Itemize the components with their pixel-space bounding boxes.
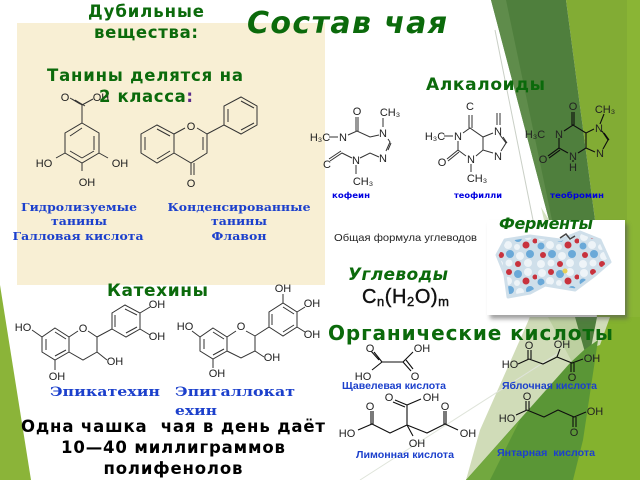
molecule: gallic acid: OH xyxy=(79,177,95,189)
molecule: malic acid: O xyxy=(525,340,534,352)
heading: tannins split in two classes: 2 класса: xyxy=(99,87,193,106)
molecule: theophylline: N xyxy=(494,151,502,163)
molecule: succinic acid: HO xyxy=(499,413,516,425)
labels: catechin names: ехин xyxy=(175,404,218,419)
molecule: oxalic acid: O xyxy=(411,371,420,383)
molecule: citric acid: O xyxy=(441,401,450,413)
background: left green wedge xyxy=(0,285,31,480)
molecule: epigallocatechin: O xyxy=(237,321,246,333)
molecule: epicatechin: OH xyxy=(149,331,165,343)
molecule: malic acid: OH xyxy=(554,339,570,351)
molecule: theophylline: CH₃ xyxy=(467,173,487,185)
label: condensed tannins: Флавон xyxy=(212,230,266,243)
molecule: epigallocatechin: OH xyxy=(264,352,280,364)
label: hydrolysable tannins: танины xyxy=(51,215,107,228)
labels: acid names: Щавелевая кислота xyxy=(342,381,446,392)
molecule: theobromine: H xyxy=(569,162,577,174)
formula: carbohydrates: C xyxy=(362,286,376,308)
labels: alkaloid names: теофилли xyxy=(454,191,502,200)
molecule: theophylline: O xyxy=(438,157,447,169)
molecule: epicatechin: OH xyxy=(49,371,65,383)
labels: acid names: Яблочная кислота xyxy=(502,380,597,392)
label: condensed tannins: танины xyxy=(211,215,267,228)
molecule: citric acid: OH xyxy=(423,392,439,404)
molecule: oxalic acid: HO xyxy=(355,371,372,383)
molecule: caffeine xyxy=(310,106,400,188)
molecule: theophylline: N xyxy=(467,154,475,166)
molecule: theobromine xyxy=(525,101,615,174)
molecule: succinic acid xyxy=(499,391,603,439)
heading: tannins split in two classes: Танины делятся на xyxy=(47,66,243,85)
labels: catechin names xyxy=(50,385,295,419)
molecule: flavone: O xyxy=(187,121,196,133)
molecule: caffeine: N xyxy=(379,128,387,140)
molecule: citric acid: O xyxy=(385,392,394,404)
molecule: malic acid: HO xyxy=(502,359,519,371)
molecule: oxalic acid: O xyxy=(366,343,375,355)
panel: enzyme picture xyxy=(487,214,628,319)
molecule: epigallocatechin: OH xyxy=(209,368,225,380)
molecule: flavone xyxy=(141,97,257,190)
molecule: epigallocatechin: OH xyxy=(304,298,320,310)
molecule: epigallocatechin: HO xyxy=(177,321,194,333)
label: hydrolysable tannins xyxy=(12,201,144,243)
label: condensed tannins: Конденсированные xyxy=(168,201,310,214)
heading: tanning substances xyxy=(88,2,204,42)
molecule: theobromine: O xyxy=(539,154,548,166)
formula: carbohydrates: n xyxy=(377,294,384,309)
text: one cup of tea fact: Одна чашка чая в день даёт xyxy=(21,417,325,436)
molecule: gallic acid: OH xyxy=(93,92,109,104)
molecule: citric acid: HO xyxy=(339,428,356,440)
molecule: oxalic acid: OH xyxy=(414,343,430,355)
molecule: succinic acid: O xyxy=(523,391,532,403)
molecule: theophylline: N xyxy=(454,131,462,143)
molecule: citric acid: OH xyxy=(460,428,476,440)
molecule: theobromine: N xyxy=(596,148,604,160)
molecule: epicatechin xyxy=(15,299,165,383)
molecule: caffeine: C xyxy=(323,159,331,171)
labels: alkaloid names xyxy=(332,190,604,200)
molecule: caffeine: O xyxy=(353,106,362,118)
molecule: malic acid xyxy=(502,339,600,384)
molecule: theobromine: N xyxy=(555,129,563,141)
heading: organic acids: Органические кислоты xyxy=(328,321,613,345)
molecule: succinic acid: OH xyxy=(587,406,603,418)
formula: carbohydrates: 2 xyxy=(407,294,414,309)
molecule: theobromine: N xyxy=(595,123,603,135)
molecule: theobromine: O xyxy=(569,101,578,113)
molecule: gallic acid: HO xyxy=(36,158,53,170)
molecule: gallic acid: O xyxy=(61,92,70,104)
molecule: epigallocatechin: OH xyxy=(304,329,320,341)
molecule: theophylline: C xyxy=(466,101,474,113)
molecule: caffeine: CH₃ xyxy=(353,176,373,188)
labels: catechin names: Эпигаллокат xyxy=(175,385,295,400)
molecule: epicatechin: HO xyxy=(15,322,32,334)
illustration: protein molecule xyxy=(497,232,610,297)
label: hydrolysable tannins: Гидролизуемые xyxy=(21,201,137,214)
text: one cup of tea fact xyxy=(21,417,325,478)
labels: acid names xyxy=(342,380,597,461)
molecule: oxalic acid xyxy=(355,343,430,383)
molecule: citric acid xyxy=(339,392,476,450)
molecule: gallic acid xyxy=(36,92,128,189)
molecule: epicatechin: OH xyxy=(107,356,123,368)
text: one cup of tea fact: 10—40 миллиграммов xyxy=(61,438,285,457)
text: one cup of tea fact: полифенолов xyxy=(104,459,242,478)
heading: alkaloids: Алкалоиды xyxy=(426,75,545,95)
molecule: malic acid: OH xyxy=(584,353,600,365)
formula: carbohydrates: O) xyxy=(415,286,438,308)
molecule: succinic acid: O xyxy=(570,427,579,439)
labels: acid names: Лимонная кислота xyxy=(356,450,454,461)
molecule: epigallocatechin: OH xyxy=(275,283,291,295)
background: bottom right green shapes xyxy=(360,317,640,480)
labels: catechin names: Эпикатехин xyxy=(50,385,161,400)
title: Состав чая xyxy=(247,6,447,41)
molecule: caffeine: CH₃ xyxy=(380,107,400,119)
heading: tanning substances: Дубильные xyxy=(88,2,204,21)
molecule: theophylline: H₃C xyxy=(425,131,445,143)
panel: tannins cream background xyxy=(17,23,325,285)
molecule: theophylline: N xyxy=(494,126,502,138)
labels: alkaloid names: теобромин xyxy=(550,190,604,200)
labels: alkaloid names: кофеин xyxy=(332,191,370,200)
formula: carbohydrates: m xyxy=(438,294,449,309)
molecule: citric acid: O xyxy=(366,401,375,413)
label: hydrolysable tannins: Галловая кислота xyxy=(12,230,144,243)
molecule: theobromine: H₃C xyxy=(525,129,545,141)
text: general carbohydrate formula caption: Общая формула углеводов xyxy=(334,232,477,244)
molecule: theobromine: N xyxy=(569,151,577,163)
molecule: caffeine: N xyxy=(352,155,360,167)
molecule: gallic acid: OH xyxy=(112,158,128,170)
molecule: epigallocatechin xyxy=(177,283,320,380)
molecule: flavone: O xyxy=(187,178,196,190)
molecule: caffeine: H₃C xyxy=(310,132,330,144)
heading: tannins split in two classes xyxy=(47,66,243,106)
label: condensed tannins xyxy=(168,201,310,243)
molecule: theobromine: CH₃ xyxy=(595,104,615,116)
molecule: theophylline xyxy=(425,101,507,185)
molecule: epicatechin: O xyxy=(79,323,88,335)
formula: carbohydrates: (H xyxy=(385,286,406,308)
molecule: epicatechin: OH xyxy=(149,299,165,311)
heading: enzymes: Ферменты xyxy=(499,214,594,233)
heading: tanning substances: вещества: xyxy=(94,23,198,42)
molecule: malic acid: O xyxy=(568,372,577,384)
molecule: caffeine: N xyxy=(379,153,387,165)
molecule: caffeine: N xyxy=(339,132,347,144)
heading: carbohydrates: Углеводы xyxy=(348,265,448,285)
labels: acid names: Янтарная кислота xyxy=(497,448,595,459)
heading: catechins: Катехины xyxy=(107,281,208,301)
background: top right green shapes xyxy=(491,0,640,480)
molecule: citric acid: OH xyxy=(409,438,425,450)
